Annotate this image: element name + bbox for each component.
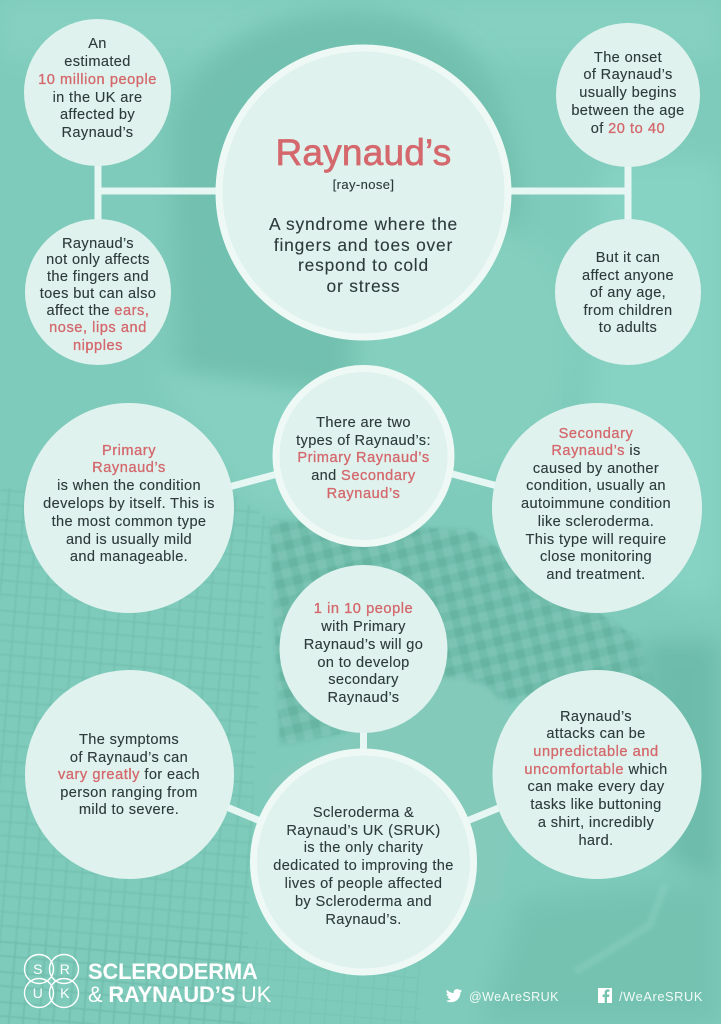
panel: onset age: usually begins <box>579 85 677 101</box>
panel: secondary Raynaud's: This type will require <box>526 532 666 548</box>
panel: attacks: attacks can be <box>546 726 646 742</box>
panel: 1 in 10: 1 in 10 people <box>314 601 413 617</box>
panel: 1 in 10: with Primary <box>320 619 406 635</box>
panel: secondary Raynaud's: close monitoring <box>540 549 652 565</box>
pronunciation: [ray-nose] <box>333 177 394 192</box>
panel: primary Raynaud's: the most common type <box>52 514 206 530</box>
connector lines <box>98 160 628 823</box>
definition <box>269 214 458 296</box>
panel: symptoms: mild to severe. <box>79 802 179 818</box>
panel: attacks: uncomfortable which <box>524 762 668 778</box>
logo: SRUK <box>24 954 272 1008</box>
panel: any age: But it can <box>596 250 660 266</box>
panel: SRUK charity: is the only charity <box>304 840 424 856</box>
icon: four linked circles: U <box>33 985 43 1001</box>
panel: primary Raynaud's <box>24 403 234 613</box>
logo wordmark <box>88 959 272 1007</box>
panel: affected body parts <box>25 219 171 365</box>
panel: any age: of any age, <box>590 285 666 301</box>
panel: attacks: Raynaud’s <box>560 709 632 725</box>
icon: facebook <box>598 988 612 1003</box>
panel: attacks: unpredictable and <box>533 744 659 760</box>
panel: any age: to adults <box>599 320 657 336</box>
panel: onset age: of 20 to 40 <box>591 121 665 137</box>
definition: respond to cold <box>298 255 429 275</box>
panel: SRUK charity: Raynaud’s UK (SRUK) <box>286 823 441 839</box>
icon: four linked circles: R <box>60 961 70 977</box>
panel: attacks: can make every day <box>527 779 665 795</box>
panel: attacks: hard. <box>578 833 614 849</box>
panel: 10 million people: estimated <box>64 54 131 70</box>
panel: secondary Raynaud's: caused by another <box>533 461 659 477</box>
definition: A syndrome where the <box>269 214 458 234</box>
panel: affected body parts: nipples <box>73 338 123 354</box>
icon: four linked circles <box>24 954 78 1008</box>
panel: symptoms: of Raynaud’s can <box>70 750 188 766</box>
panel: 1 in 10 <box>280 565 448 733</box>
panel: SRUK charity: Raynaud’s. <box>325 912 402 928</box>
panel: 10 million people: affected by <box>60 107 135 123</box>
panel: any age <box>555 219 701 365</box>
panel: affected body parts: the fingers and <box>47 269 149 285</box>
panel: 1 in 10: on to develop <box>317 655 410 671</box>
panel: 10 million people: An <box>88 36 107 52</box>
panel: two types: and Secondary <box>311 468 416 484</box>
panel: two types: types of Raynaud’s: <box>296 433 431 449</box>
panel: two types: Primary Raynaud’s <box>297 450 430 466</box>
panel: two types <box>276 368 451 544</box>
panel: affected body parts: toes but can also <box>40 286 156 302</box>
panel: primary Raynaud's: and manageable. <box>70 549 188 565</box>
facebook handle: /WeAreSRUK <box>619 989 703 1004</box>
panel: affected body parts: nose, lips and <box>49 320 147 336</box>
panel: symptoms: The symptoms <box>79 732 179 748</box>
panel: symptoms <box>25 670 234 879</box>
panel: onset age: between the age <box>571 103 685 119</box>
panel: secondary Raynaud's: like scleroderma. <box>538 514 654 530</box>
definition: fingers and toes over <box>274 235 453 255</box>
panel: attacks: tasks like buttoning <box>530 797 662 813</box>
panel: onset age: of Raynaud’s <box>583 67 673 83</box>
panel: secondary Raynaud's: Raynaud’s is <box>551 443 641 459</box>
panel: attacks: a shirt, incredibly <box>538 815 655 831</box>
panel: affected body parts: not only affects <box>46 252 150 268</box>
panel: secondary Raynaud's: condition, usually an <box>526 478 666 494</box>
icon: four linked circles: S <box>33 961 43 977</box>
logo wordmark: SCLERODERMA <box>88 959 258 984</box>
twitter handle: @WeAreSRUK <box>469 990 559 1004</box>
panel: attacks <box>492 670 702 879</box>
panel: primary Raynaud's: Primary <box>102 443 156 459</box>
panel: 1 in 10: Raynaud’s <box>328 690 399 706</box>
panel: 1 in 10: secondary <box>328 672 399 688</box>
panel: onset age <box>556 23 700 167</box>
panel: SRUK charity: by Scleroderma and <box>295 894 432 910</box>
panel: onset age: The onset <box>594 50 662 66</box>
panel: SRUK charity: dedicated to improving the <box>273 858 454 874</box>
panel: affected body parts: affect the ears, <box>46 303 150 319</box>
panel: primary Raynaud's: Raynaud’s <box>92 460 166 476</box>
panel: SRUK charity <box>254 752 474 972</box>
definition: or stress <box>327 276 400 296</box>
panel: secondary Raynaud's: autoimmune condition <box>521 496 671 512</box>
panel: secondary Raynaud's: and treatment. <box>546 567 646 583</box>
panel: primary Raynaud's: develops by itself. This is <box>43 496 215 512</box>
panel: SRUK charity: lives of people affected <box>285 876 442 892</box>
panel: primary Raynaud's: is when the condition <box>57 478 201 494</box>
panel: any age: from children <box>583 303 673 319</box>
title: Raynaud’s <box>276 132 451 173</box>
icon: twitter bird <box>446 989 462 1002</box>
panel: 10 million people: Raynaud’s <box>62 125 133 141</box>
panel: two types: Raynaud’s <box>327 486 400 502</box>
panel: SRUK charity: Scleroderma & <box>313 805 414 821</box>
panel: symptoms: vary greatly for each <box>58 767 200 783</box>
panel: secondary Raynaud's <box>492 403 702 613</box>
panel: secondary Raynaud's: Secondary <box>559 426 634 442</box>
panel: symptoms: person ranging from <box>60 785 198 801</box>
panel: affected body parts: Raynaud’s <box>62 236 134 252</box>
panel: any age: affect anyone <box>582 268 674 284</box>
panel: primary Raynaud's: and is usually mild <box>66 532 192 548</box>
panel: two types: There are two <box>316 415 411 431</box>
logo wordmark: & RAYNAUD’S UK <box>88 982 272 1007</box>
panel: 10 million people: in the UK are <box>53 90 142 106</box>
panel: 1 in 10: Raynaud’s will go <box>304 637 423 653</box>
icon: four linked circles: K <box>60 985 70 1001</box>
panel: central definition <box>219 48 508 337</box>
panel: 10 million people <box>24 19 171 166</box>
panel: 10 million people: 10 million people <box>38 72 157 88</box>
